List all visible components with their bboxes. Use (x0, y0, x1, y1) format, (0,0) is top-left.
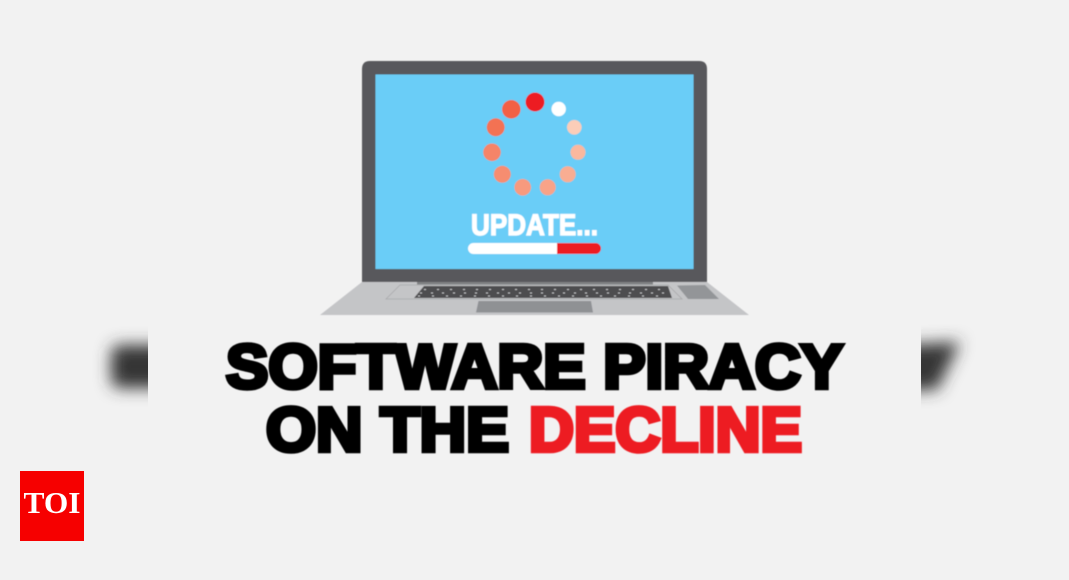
trackpad (476, 301, 593, 312)
keyboard recess (386, 285, 682, 299)
title highlight word: DECLINE (529, 396, 802, 465)
laptop hinge (417, 282, 653, 284)
logo: TOI (20, 471, 84, 541)
blurred backdrop: left letter fragment (111, 345, 186, 388)
laptop base (320, 282, 749, 315)
progress bar (468, 243, 601, 254)
centre panel (148, 2, 921, 460)
title line 2: ON THE (266, 396, 509, 465)
laptop screen (376, 74, 694, 269)
keyboard keys (414, 286, 672, 298)
right panel (677, 285, 719, 299)
icon: laptop (320, 61, 749, 315)
infographic canvas (20, 60, 970, 541)
blurred backdrop: right letter fragment (900, 342, 960, 390)
title line 1: SOFTWARE PIRACY (226, 333, 843, 402)
laptop lid (362, 61, 707, 282)
logo: TOI: TOI (24, 485, 80, 520)
title (226, 333, 843, 465)
loading spinner (483, 92, 586, 196)
update label: UPDATE... (471, 209, 598, 242)
